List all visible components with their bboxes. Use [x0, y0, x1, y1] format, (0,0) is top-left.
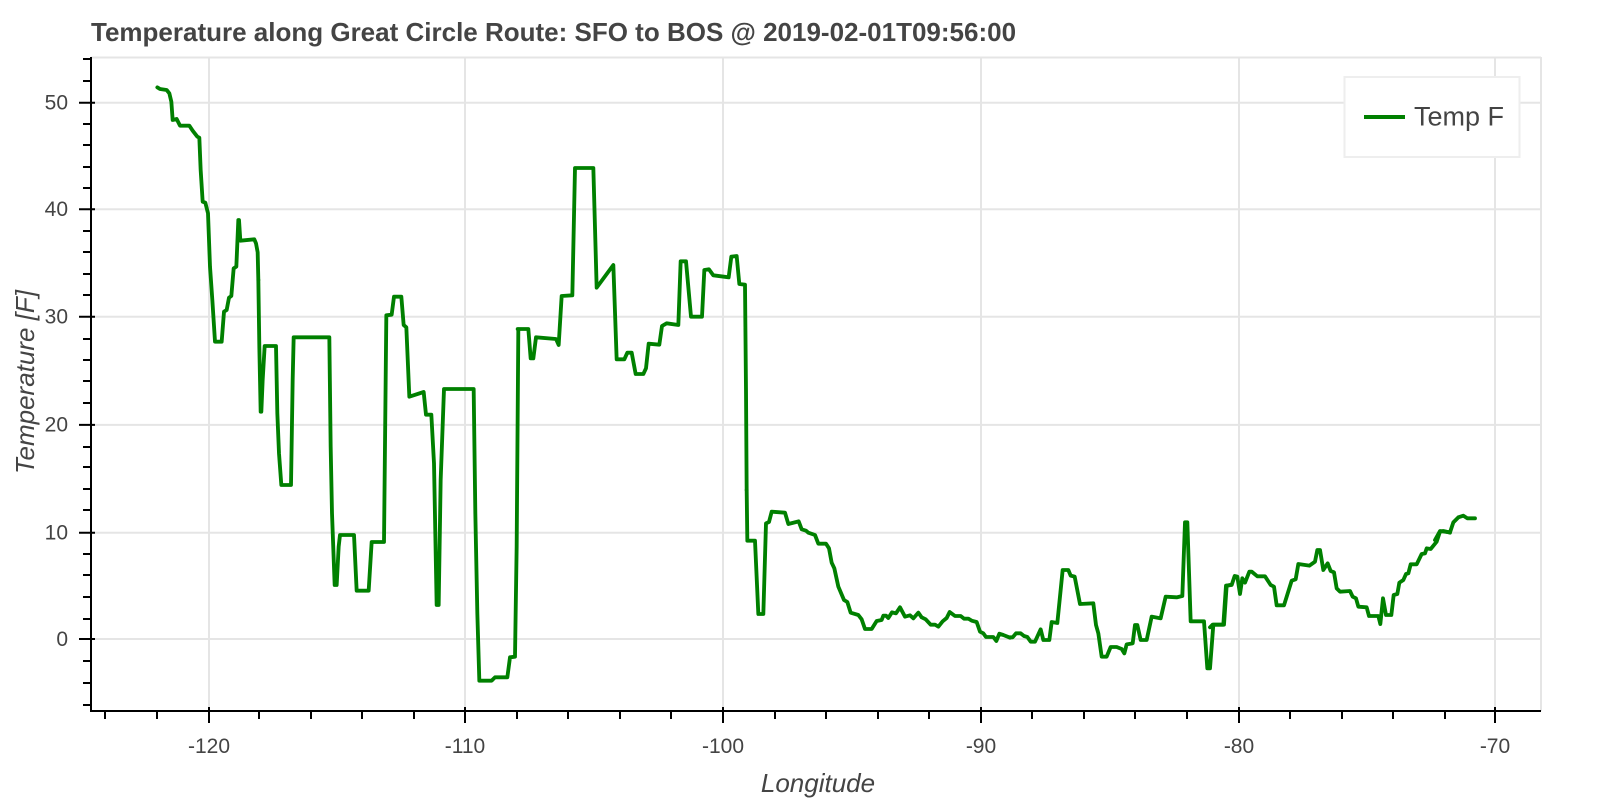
- x tick labels: -80: [1224, 735, 1254, 758]
- x tick labels: [188, 735, 1510, 758]
- x tick labels: -70: [1480, 735, 1510, 758]
- x axis: [90, 707, 1541, 758]
- x tick labels: -120: [188, 735, 230, 758]
- x tick labels: -90: [966, 735, 996, 758]
- y tick labels: 30: [45, 306, 68, 328]
- y tick labels: 0: [56, 628, 68, 651]
- x tick labels: -100: [702, 735, 744, 758]
- y tick labels: 50: [45, 92, 68, 114]
- line series: Temp F: [157, 87, 1475, 681]
- title: Temperature along Great Circle Route: SFO to BOS @ 2019-02-01T09:56:00: [91, 17, 1016, 47]
- y axis label: Temperature [F]: [10, 289, 40, 474]
- y tick labels: 20: [45, 414, 68, 437]
- legend: [1344, 77, 1520, 157]
- y tick labels: 10: [45, 522, 68, 544]
- x tick labels: -110: [445, 735, 485, 758]
- legend line sample: [1364, 115, 1405, 119]
- x axis label: Longitude: [761, 768, 875, 798]
- y tick labels: 40: [45, 198, 68, 221]
- y axis: [45, 57, 95, 712]
- y tick labels: [45, 92, 68, 651]
- legend label: Temp F: [1414, 102, 1504, 132]
